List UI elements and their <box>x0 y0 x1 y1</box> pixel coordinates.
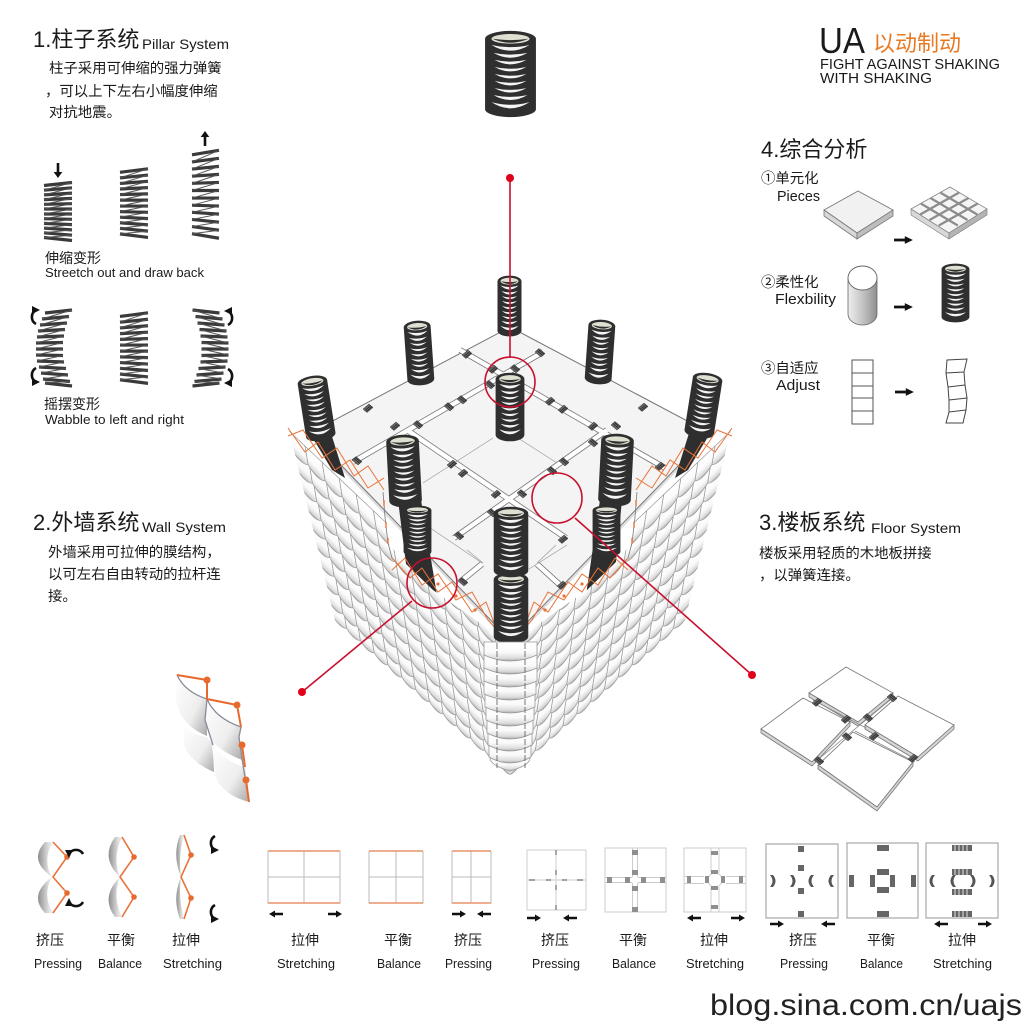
labels: membrane states <box>34 932 222 971</box>
text: flexibility label: Flexbility <box>775 292 837 308</box>
labels: membrane states: Stretching <box>163 957 222 971</box>
labels: spring joint states: 平衡 <box>867 932 895 948</box>
icon: solid cylinder <box>848 266 877 325</box>
heading: wall system: Wall System <box>142 519 226 535</box>
diagram: frame pressing <box>452 851 491 918</box>
callout: floor pointer <box>532 473 756 679</box>
text: pieces label <box>761 170 820 205</box>
text: pillar description <box>45 60 222 121</box>
callout: wall pointer <box>298 558 457 696</box>
title: UA fight against shaking <box>819 20 1000 87</box>
heading: floor system <box>759 510 961 536</box>
labels: spring joint states <box>780 932 992 971</box>
title: UA fight against shaking: WITH SHAKING <box>820 71 932 87</box>
front spring <box>494 507 528 643</box>
text: adjust label: ③自适应 <box>761 359 819 377</box>
icon: divided plate <box>911 187 987 239</box>
main model: cube building <box>288 276 732 778</box>
corner springs left and right <box>297 371 723 478</box>
text: floor description <box>759 545 932 584</box>
labels: spring joint states: Balance <box>860 957 903 971</box>
text: pillar description: 柱子采用可伸缩的强力弹簧 <box>49 60 222 77</box>
watermark: blog.sina.com.cn/uajs <box>710 989 1022 1022</box>
callout: pillar pointer <box>485 174 535 407</box>
diagram: spring joint stretching <box>926 843 998 928</box>
text: wobble caption <box>44 396 185 427</box>
labels: floor joint states: 挤压 <box>541 932 569 948</box>
back springs <box>403 276 616 441</box>
labels: floor joint states: 平衡 <box>619 932 647 948</box>
labels: frame states: 平衡 <box>384 932 412 948</box>
labels: floor joint states: Stretching <box>686 957 744 971</box>
labels: membrane states: Balance <box>98 957 142 971</box>
labels: floor joint states: Pressing <box>532 957 580 971</box>
diagram: membrane stretching <box>176 835 219 923</box>
diagram: spring joint pressing <box>766 844 838 928</box>
labels: floor joint states: Balance <box>612 957 656 971</box>
text: wall description <box>48 544 221 605</box>
heading: pillar system: 1.柱子系统 <box>33 27 139 52</box>
diagram: floor joint balance <box>605 848 666 912</box>
title: UA fight against shaking: 以动制动 <box>873 31 961 56</box>
labels: frame states: 拉伸 <box>291 932 319 948</box>
arrow: pieces <box>894 236 913 244</box>
text: flexibility label <box>761 274 837 308</box>
title: UA fight against shaking: FIGHT AGAINST SHAKING <box>820 57 1000 73</box>
diagram: floor joint stretching <box>684 848 746 922</box>
text: pillar description: 对抗地震。 <box>49 104 121 121</box>
arrow: adjust <box>895 388 914 396</box>
wall left face <box>288 428 514 778</box>
labels: membrane states: 挤压 <box>36 932 64 948</box>
text: pieces label: ①单元化 <box>761 170 819 187</box>
diagram: wobble deformation springs <box>32 306 232 387</box>
text: stretch caption: Streetch out and draw back <box>45 266 205 280</box>
heading: wall system <box>33 510 226 535</box>
text: wall description: 接。 <box>48 588 77 605</box>
wall front corner column <box>484 642 537 771</box>
labels: membrane states: 平衡 <box>107 932 135 948</box>
heading: wall system: 2.外墙系统 <box>33 510 139 535</box>
heading: pillar system <box>33 27 229 52</box>
labels: frame states <box>277 932 492 971</box>
icon: top spring <box>485 31 536 117</box>
labels: membrane states: Pressing <box>34 957 82 971</box>
labels: floor joint states <box>532 932 744 971</box>
heading: floor system: Floor System <box>871 520 961 536</box>
diagram: stretch deformation springs <box>44 131 219 240</box>
title: UA fight against shaking: UA <box>819 20 865 61</box>
text: adjust label <box>761 359 820 394</box>
detail: floor module <box>761 667 954 811</box>
labels: frame states: Pressing <box>445 957 492 971</box>
text: stretch caption <box>45 250 205 280</box>
text: pillar description: ，可以上下左右小幅度伸缩 <box>45 83 218 100</box>
labels: floor joint states: 拉伸 <box>700 932 728 948</box>
floor grid <box>310 327 710 644</box>
icon: deformed frame <box>946 359 967 423</box>
text: floor description: ，以弹簧连接。 <box>759 567 860 584</box>
labels: spring joint states: 拉伸 <box>948 932 976 948</box>
arrow: flexibility <box>894 303 913 311</box>
text: wall description: 以可左右自由转动的拉杆连 <box>48 566 221 583</box>
labels: frame states: 挤压 <box>454 932 482 948</box>
diagram: floor joint pressing <box>527 850 586 922</box>
text: wobble caption: 摇摆变形 <box>44 396 100 412</box>
text: wobble caption: Wabble to left and right <box>45 413 185 427</box>
text: pieces label: Pieces <box>777 189 820 205</box>
text: floor description: 楼板采用轻质的木地板拼接 <box>759 545 932 562</box>
diagram: frame balance <box>369 851 423 903</box>
detail: wall membrane module <box>176 675 250 802</box>
diagram: membrane pressing <box>38 842 83 913</box>
labels: spring joint states: 挤压 <box>789 932 817 948</box>
labels: spring joint states: Stretching <box>933 957 992 971</box>
labels: frame states: Balance <box>377 957 421 971</box>
heading: synthesis: 4.综合分析 <box>761 137 867 162</box>
text: flexibility label: ②柔性化 <box>761 274 819 291</box>
labels: spring joint states: Pressing <box>780 957 828 971</box>
text: adjust label: Adjust <box>776 378 820 394</box>
text: stretch caption: 伸缩变形 <box>45 250 101 266</box>
labels: frame states: Stretching <box>277 957 335 971</box>
labels: membrane states: 拉伸 <box>172 932 200 948</box>
diagram: spring joint balance <box>847 843 918 918</box>
text: wall description: 外墙采用可拉伸的膜结构， <box>48 544 221 561</box>
icon: solid plate <box>824 191 893 239</box>
heading: floor system: 3.楼板系统 <box>759 510 865 535</box>
heading: pillar system: Pillar System <box>142 36 229 52</box>
diagram: frame stretching <box>268 851 342 918</box>
wall right face <box>506 428 732 778</box>
icon: straight frame <box>852 360 873 424</box>
mid front springs <box>386 433 634 595</box>
diagram: membrane balance <box>109 837 137 917</box>
icon: flexible spring <box>942 264 969 322</box>
